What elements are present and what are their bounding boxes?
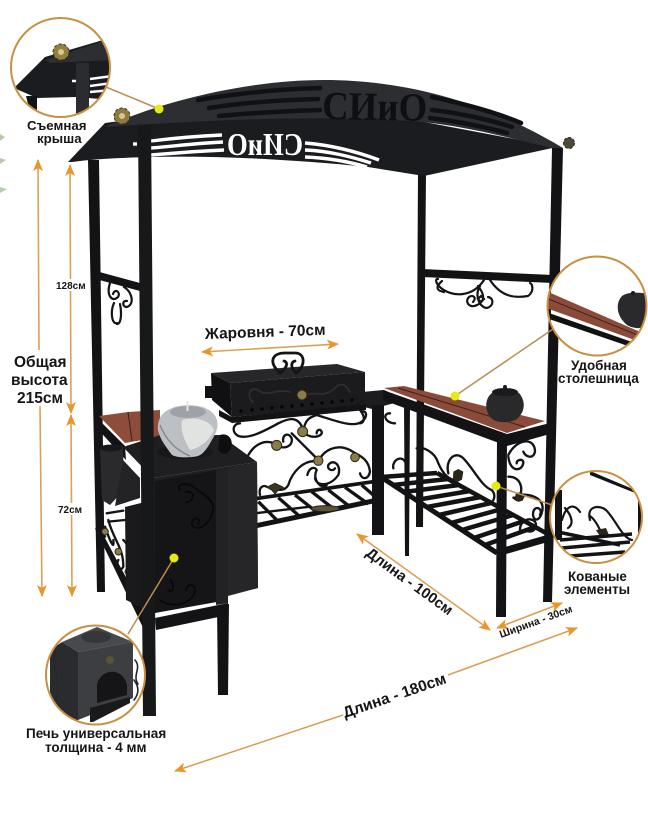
caption: stove: толщина - 4 мм: [45, 740, 147, 755]
label: overall height: Общая: [14, 354, 67, 371]
caption: removable roof: Съемная: [27, 118, 87, 133]
caption: worktop: [558, 358, 639, 386]
roof underside: [68, 110, 557, 176]
dimension arrows: [38, 160, 577, 771]
front-left post: [138, 125, 156, 716]
stove legs and base frame: [155, 603, 229, 695]
roof lettering dark: СИиО: [322, 83, 428, 130]
caption: removable roof: [27, 118, 87, 146]
grill ornament: [249, 385, 350, 402]
label: grill width: Жаровня - 70см: [204, 322, 326, 343]
right front post: [543, 148, 563, 602]
left table: [94, 410, 160, 628]
inset: forged elements: [549, 470, 648, 565]
caption: forged elements: элементы: [564, 582, 630, 597]
grill front face: [230, 372, 365, 417]
overall height arrow: [38, 160, 42, 596]
left table wood: [99, 410, 160, 443]
stove front face: [153, 462, 258, 613]
right crossbar with scrolls: [422, 269, 553, 308]
inset: worktop: [546, 256, 648, 356]
upper height arrow: [70, 165, 71, 413]
caption: worktop: столешница: [558, 371, 639, 386]
grill side handle: [205, 386, 215, 398]
caption: stove: [26, 726, 166, 755]
roof top face: [105, 80, 563, 149]
stove door panel: [155, 462, 258, 613]
length 100 arrow: [357, 534, 490, 630]
table legs: [372, 400, 507, 617]
silver cauldron: [158, 401, 218, 457]
grill support frame: [219, 404, 366, 423]
stove side face: [125, 500, 155, 613]
label: length 100: Длина - 100см: [363, 545, 456, 619]
yellow markers: [154, 104, 500, 562]
shelf ornament: [311, 506, 339, 512]
grill air holes: [239, 398, 354, 413]
right table ironwork: [360, 410, 543, 532]
caption: stove: Печь универсальная: [26, 726, 166, 741]
roof rosette left: [114, 108, 130, 124]
grill left end: [211, 373, 232, 417]
stove burner plate: [157, 445, 213, 459]
right table frame: [383, 390, 550, 446]
depth 30 arrow: [497, 603, 562, 628]
background foliage remnants: [0, 134, 7, 193]
left shelf rail: [95, 527, 146, 628]
forged rosettes on right shelf: [453, 469, 525, 502]
label: overall height: 215см: [17, 390, 63, 407]
gazebo back-left and back-right posts: [88, 160, 426, 592]
grill lid handle: [273, 353, 303, 373]
center shelf: [255, 482, 378, 526]
left ironwork: [95, 507, 146, 628]
length 180 arrow: [175, 628, 577, 771]
stove door scrolls: [160, 484, 213, 605]
right table: [360, 148, 563, 617]
left crossbar with scrolls: [92, 270, 140, 324]
corner table top: [360, 390, 406, 409]
lower height arrow: [71, 415, 72, 596]
label: overall height: высота: [11, 372, 68, 389]
caption: worktop: Удобная: [571, 358, 627, 373]
roof rosette right: [564, 138, 574, 148]
barbecue grill: [205, 353, 366, 423]
label: 128 cm: 128см: [56, 281, 86, 292]
stove chimney: [100, 444, 140, 506]
caption: forged elements: Кованые: [568, 569, 627, 584]
caption: removable roof: крыша: [37, 131, 82, 146]
label: depth 30: Ширина - 30см: [498, 603, 574, 641]
leader lines: [106, 87, 553, 634]
roof white stripes: [133, 135, 379, 167]
stove top face: [123, 435, 257, 478]
right shelf: [381, 473, 549, 553]
grill top face: [211, 364, 365, 383]
center ironwork: [234, 411, 370, 495]
caption: forged elements: [564, 569, 630, 597]
roof slots: [198, 88, 521, 133]
grill width arrow: [202, 344, 338, 352]
ironwork rosettes: [267, 427, 359, 494]
left table frame: [94, 415, 126, 460]
label: overall height: [11, 354, 68, 407]
label: 72 cm: 72см: [58, 505, 82, 516]
roof: [68, 80, 574, 176]
black cauldron: [486, 385, 524, 422]
stove: [100, 125, 258, 716]
label: length 180: Длина - 180см: [341, 671, 449, 722]
stove door knob: [218, 434, 232, 454]
inset: removable roof: [10, 17, 112, 119]
inset: stove: [45, 625, 147, 727]
right table wood top: [384, 386, 545, 433]
roof lettering mirrored white: СИиО: [227, 126, 303, 162]
